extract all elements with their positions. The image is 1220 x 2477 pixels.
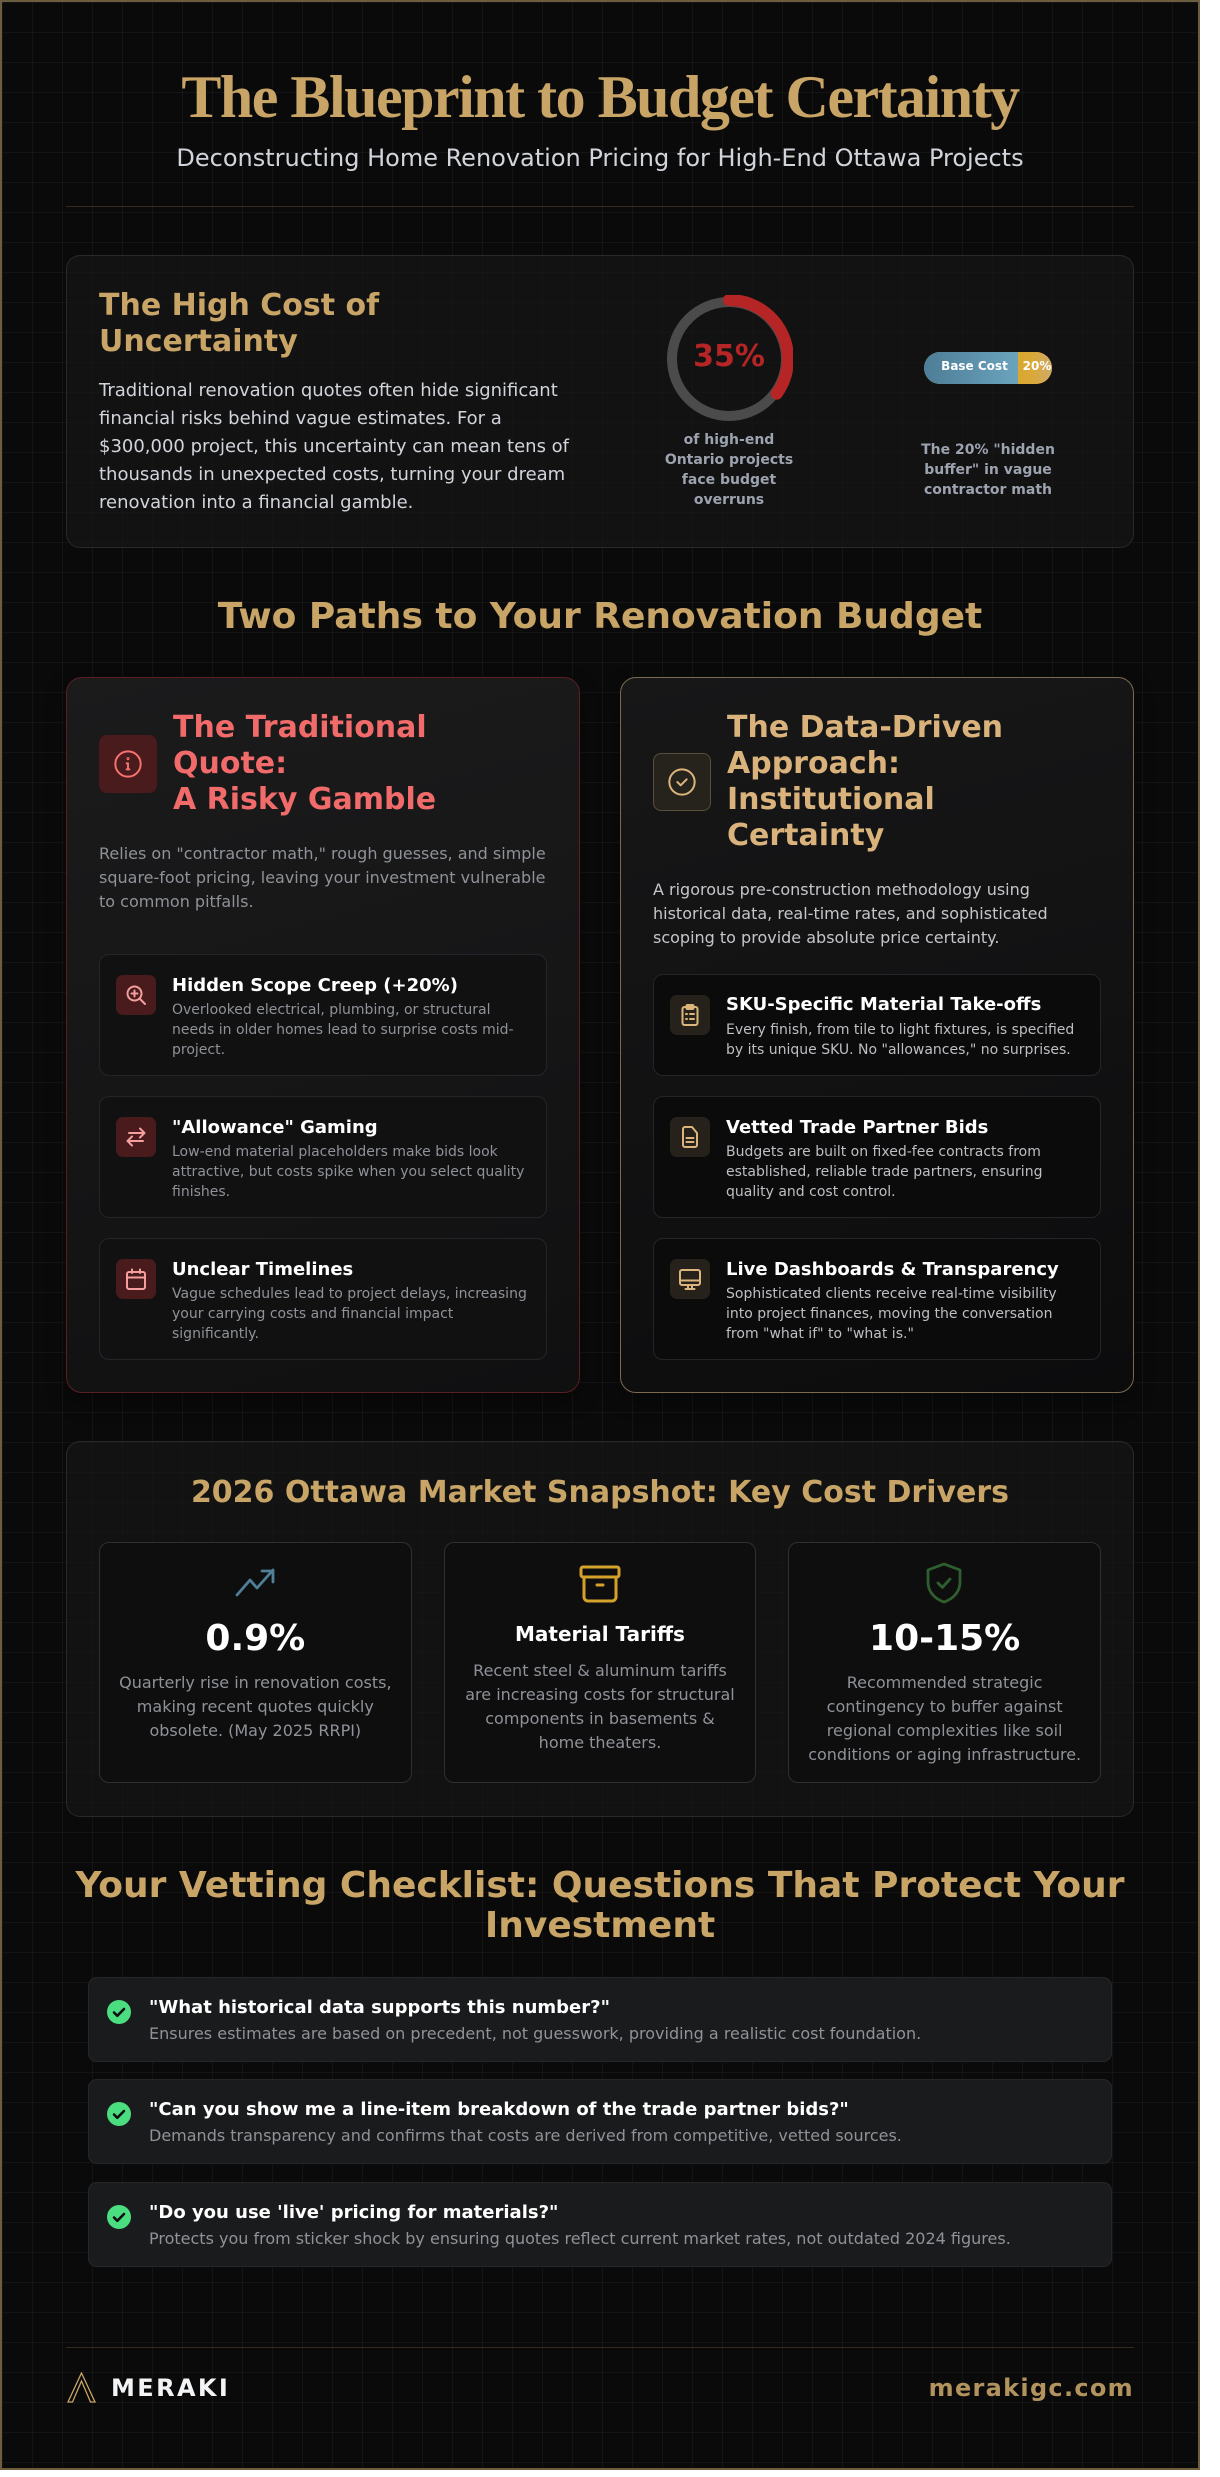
item title: Unclear Timelines <box>172 1259 353 1280</box>
checklist item 2 <box>88 2079 1112 2164</box>
item title: Live Dashboards & Transparency <box>726 1259 1059 1280</box>
heading: vetting checklist: Your Vetting Checklist: Questions That Protect Your <box>75 1865 1125 1906</box>
item description <box>172 1286 527 1342</box>
icon: info <box>99 735 157 793</box>
caption: 35% overruns: of high-end <box>684 432 774 448</box>
logo: meraki wordmark: MERAKI <box>111 2374 230 2402</box>
icon: check <box>107 2000 131 2024</box>
item description: needs in older homes lead to surprise costs mid- <box>172 1022 514 1038</box>
card: unclear timelines <box>99 1238 547 1360</box>
card: sku material take-offs <box>653 974 1101 1076</box>
heading: vetting checklist <box>75 1865 1125 1946</box>
item description: project. <box>172 1042 225 1058</box>
heading: data-driven approach: The Data-Driven <box>727 710 1003 745</box>
panel: the high cost of uncertainty <box>66 255 1134 548</box>
heading: traditional quote <box>173 710 436 817</box>
card description: home theaters. <box>539 1733 661 1752</box>
caption: 35% overruns: Ontario projects <box>665 452 793 468</box>
item description: Overlooked electrical, plumbing, or structural <box>172 1002 490 1018</box>
heading: data-driven approach: Certainty <box>727 818 884 853</box>
stat description: obsolete. (May 2025 RRPI) <box>149 1721 361 1740</box>
question: "Do you use 'live' pricing for materials?" <box>149 2202 558 2223</box>
heading: high cost <box>99 288 380 359</box>
heading: vetting checklist: Investment <box>485 1905 715 1946</box>
icon: clipboard <box>670 995 710 1035</box>
heading: two paths: Two Paths to Your Renovation Budget <box>218 596 982 637</box>
item description <box>726 1286 1057 1342</box>
panel: data-driven approach <box>620 677 1134 1393</box>
item title: Hidden Scope Creep (+20%) <box>172 975 458 996</box>
explanation: Ensures estimates are based on precedent, not guesswork, providing a realistic cost foundation. <box>149 2024 921 2043</box>
item description <box>726 1022 1074 1058</box>
text block: traditional intro: square-foot pricing, leaving your investment vulnerable <box>99 868 546 887</box>
item description: attractive, but costs spike when you select quality <box>172 1164 524 1180</box>
chart: 20% buffer pill: Base Cost <box>941 359 1008 373</box>
item title: "Allowance" Gaming <box>172 1117 378 1138</box>
text block: high cost description: $300,000 project, this uncertainty can mean tens of <box>99 436 569 457</box>
item title: SKU-Specific Material Take-offs <box>726 994 1041 1015</box>
explanation: Demands transparency and confirms that costs are derived from competitive, vetted sources. <box>149 2126 902 2145</box>
card: 0.9% <box>99 1542 412 1783</box>
stat description: regional complexities like soil <box>827 1721 1062 1740</box>
icon: trending up <box>236 1568 274 1596</box>
chart: 20% buffer pill: 20% <box>1023 359 1051 373</box>
heading: traditional quote: The Traditional <box>173 710 427 745</box>
item description: Sophisticated clients receive real-time visibility <box>726 1286 1057 1302</box>
panel: traditional quote <box>66 677 580 1393</box>
question: "Can you show me a line-item breakdown of the trade partner bids?" <box>149 2099 849 2120</box>
stat description: making recent quotes quickly <box>137 1697 374 1716</box>
stat description: Recommended strategic <box>847 1673 1043 1692</box>
item description <box>726 1144 1042 1200</box>
heading: market snapshot: 2026 Ottawa Market Snapshot: Key Cost Drivers <box>191 1475 1009 1510</box>
item description: Every finish, from tile to light fixtures, is specified <box>726 1022 1074 1038</box>
card description: Recent steel & aluminum tariffs <box>473 1661 727 1680</box>
subtitle: Deconstructing Home Renovation Pricing for High-End Ottawa Projects <box>176 144 1024 172</box>
caption: 35% overruns: overruns <box>694 492 764 508</box>
stat value: 10-15% <box>869 1618 1020 1659</box>
heading: data-driven approach: Institutional <box>727 782 935 817</box>
explanation: Protects you from sticker shock by ensuring quotes reflect current market rates, not outdated 2024 figures. <box>149 2229 1011 2248</box>
icon: archive box <box>580 1566 620 1602</box>
caption: hidden buffer: The 20% "hidden <box>921 442 1055 458</box>
text block: high cost description: thousands in unexpected costs, turning your dream <box>99 464 565 485</box>
item description: into project finances, moving the conversation <box>726 1306 1052 1322</box>
chart: 20% buffer pill <box>924 352 1052 384</box>
caption: hidden buffer: buffer" in vague <box>924 462 1052 478</box>
text block: data-driven intro: scoping to provide absolute price certainty. <box>653 928 999 947</box>
caption: 35% overruns: face budget <box>682 472 776 488</box>
item description: Budgets are built on fixed-fee contracts from <box>726 1144 1041 1160</box>
card: hidden scope creep <box>99 954 547 1076</box>
text block: traditional intro <box>99 844 546 911</box>
item description <box>172 1144 524 1200</box>
text block: high cost description: Traditional renovation quotes often hide significant <box>99 380 558 401</box>
heading: high cost: Uncertainty <box>99 324 298 359</box>
card description: are increasing costs for structural <box>465 1685 735 1704</box>
panel: market snapshot <box>66 1441 1134 1817</box>
stat description: Quarterly rise in renovation costs, <box>119 1673 392 1692</box>
heading: traditional quote: A Risky Gamble <box>173 782 436 817</box>
item title: Vetted Trade Partner Bids <box>726 1117 988 1138</box>
caption: hidden buffer: contractor math <box>924 482 1052 498</box>
item description: established, reliable trade partners, ensuring <box>726 1164 1042 1180</box>
item description: finishes. <box>172 1184 230 1200</box>
chart: 35% donut <box>667 295 793 421</box>
card: allowance gaming <box>99 1096 547 1218</box>
icon: magnifier plus <box>116 975 156 1015</box>
item description: by its unique SKU. No "allowances," no surprises. <box>726 1042 1071 1058</box>
card: live dashboards <box>653 1238 1101 1360</box>
text block: high cost description: renovation into a financial gamble. <box>99 492 413 513</box>
card title: Material Tariffs <box>515 1622 685 1646</box>
caption: hidden buffer <box>921 442 1055 498</box>
stat value: 0.9% <box>205 1618 305 1659</box>
icon: monitor <box>670 1259 710 1299</box>
stat description <box>119 1673 392 1740</box>
item description: quality and cost control. <box>726 1184 896 1200</box>
checklist item 1 <box>88 1977 1112 2062</box>
caption: 35% overruns <box>665 432 793 508</box>
text block: traditional intro: Relies on "contractor math," rough guesses, and simple <box>99 844 546 863</box>
heading: high cost: The High Cost of <box>99 288 379 323</box>
icon: check circle <box>653 753 711 811</box>
item description: significantly. <box>172 1326 259 1342</box>
text block: data-driven intro: A rigorous pre-construction methodology using <box>653 880 1030 899</box>
card description: components in basements & <box>485 1709 715 1728</box>
title: The Blueprint to Budget Certainty <box>181 64 1019 130</box>
stat description: contingency to buffer against <box>827 1697 1063 1716</box>
checklist item 3 <box>88 2182 1112 2267</box>
stat description: conditions or aging infrastructure. <box>808 1745 1081 1764</box>
heading: data-driven approach: Approach: <box>727 746 900 781</box>
icon: check <box>107 2205 131 2229</box>
card description <box>465 1661 735 1752</box>
card: 10-15% <box>788 1542 1101 1783</box>
card: vetted trade partner bids <box>653 1096 1101 1218</box>
item description: from "what if" to "what is." <box>726 1326 914 1342</box>
icon: shield check <box>926 1562 962 1604</box>
item description: Vague schedules lead to project delays, increasing <box>172 1286 527 1302</box>
icon: check <box>107 2102 131 2126</box>
logo: meraki mark <box>67 2372 96 2403</box>
text block: high cost description <box>98 380 570 513</box>
stat description <box>808 1673 1081 1764</box>
item description: your carrying costs and financial impact <box>172 1306 453 1322</box>
item description: Low-end material placeholders make bids look <box>172 1144 498 1160</box>
text block: data-driven intro: historical data, real-time rates, and sophisticated <box>653 904 1048 923</box>
text block: traditional intro: to common pitfalls. <box>99 892 254 911</box>
item description <box>172 1002 514 1058</box>
website url: merakigc.com <box>929 2374 1134 2402</box>
icon: document <box>670 1117 710 1157</box>
chart: 35% donut: 35% <box>693 339 765 374</box>
icon: calendar <box>116 1259 156 1299</box>
text block: data-driven intro <box>653 880 1048 947</box>
icon: swap arrows <box>116 1117 156 1157</box>
card: material tariffs <box>444 1542 756 1783</box>
heading: data-driven approach <box>727 710 1003 853</box>
heading: traditional quote: Quote: <box>173 746 287 781</box>
question: "What historical data supports this number?" <box>149 1997 610 2018</box>
text block: high cost description: financial risks behind vague estimates. For a <box>99 408 502 429</box>
